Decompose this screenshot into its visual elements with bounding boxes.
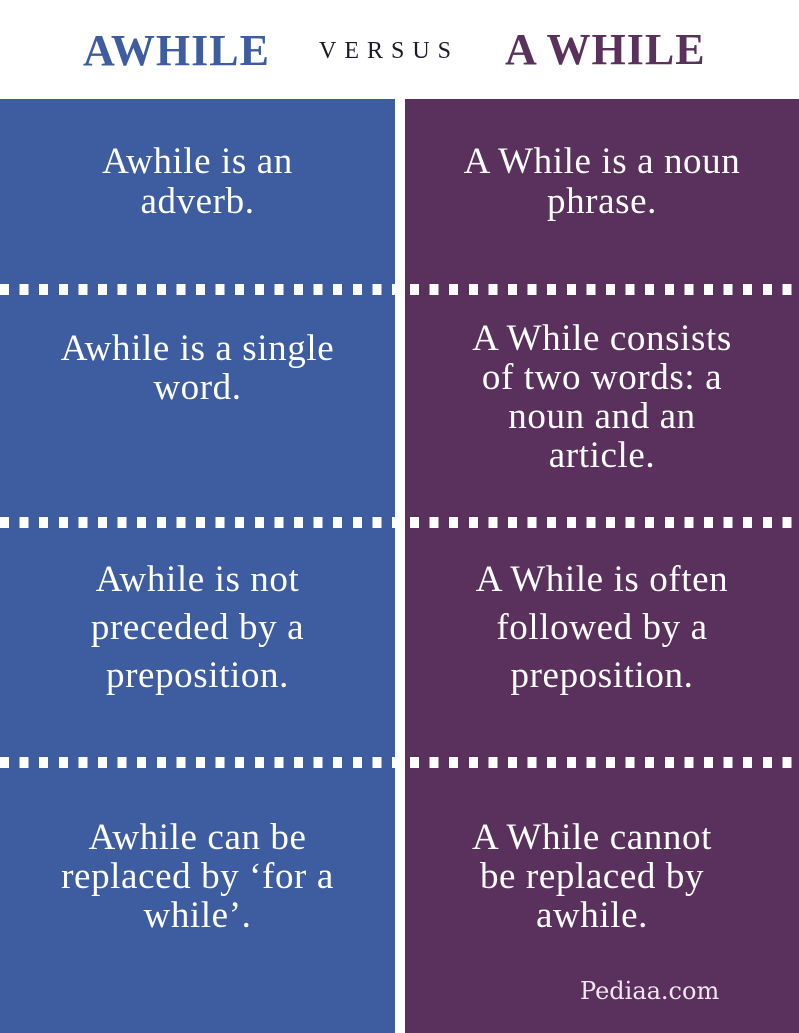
logo: pediaa.com: Pediaa.com <box>580 977 719 1005</box>
text: awhile replaced: Awhile can be <box>88 817 307 858</box>
text: a while noun phrase: phrase. <box>547 181 657 222</box>
text: a while replaced: be replaced by <box>480 856 704 897</box>
heading: awhile: AWHILE <box>83 26 270 75</box>
text: a while replaced <box>472 817 712 936</box>
text: a while preposition <box>476 559 728 696</box>
text: a while preposition: followed by a <box>496 607 708 648</box>
text: a while noun phrase: A While is a noun <box>464 141 740 182</box>
text: awhile preposition <box>91 559 304 696</box>
text: awhile adverb: adverb. <box>140 181 255 222</box>
text: a while preposition: A While is often <box>476 559 728 600</box>
heading: a while: A WHILE <box>505 25 706 74</box>
text: a while replaced: awhile. <box>536 895 648 936</box>
text: a while two words: noun and an <box>508 396 696 437</box>
text: awhile single word: Awhile is a single <box>61 328 334 369</box>
text: a while two words: of two words: a <box>482 357 722 398</box>
text: awhile single word <box>61 328 334 408</box>
text: awhile replaced <box>61 817 334 936</box>
text: awhile adverb: Awhile is an <box>102 141 293 182</box>
text: awhile preposition: preceded by a <box>91 607 304 648</box>
text: a while two words: article. <box>549 435 655 476</box>
text: a while replaced: A While cannot <box>472 817 712 858</box>
text: a while two words: A While consists <box>472 318 732 359</box>
text: awhile single word: word. <box>153 367 242 408</box>
panel: awhile <box>0 99 395 1033</box>
heading: versus: VERSUS <box>319 38 459 64</box>
panel: a while <box>405 99 799 1033</box>
text: awhile replaced: replaced by ‘for a <box>61 856 334 897</box>
title <box>83 25 706 75</box>
text: a while preposition: preposition. <box>511 655 693 696</box>
text: awhile replaced: while’. <box>144 895 251 936</box>
text: a while noun phrase <box>464 141 740 222</box>
text: a while two words <box>472 318 732 476</box>
text: awhile preposition: preposition. <box>106 655 289 696</box>
text: awhile adverb <box>102 141 293 222</box>
text: awhile preposition: Awhile is not <box>96 559 299 600</box>
